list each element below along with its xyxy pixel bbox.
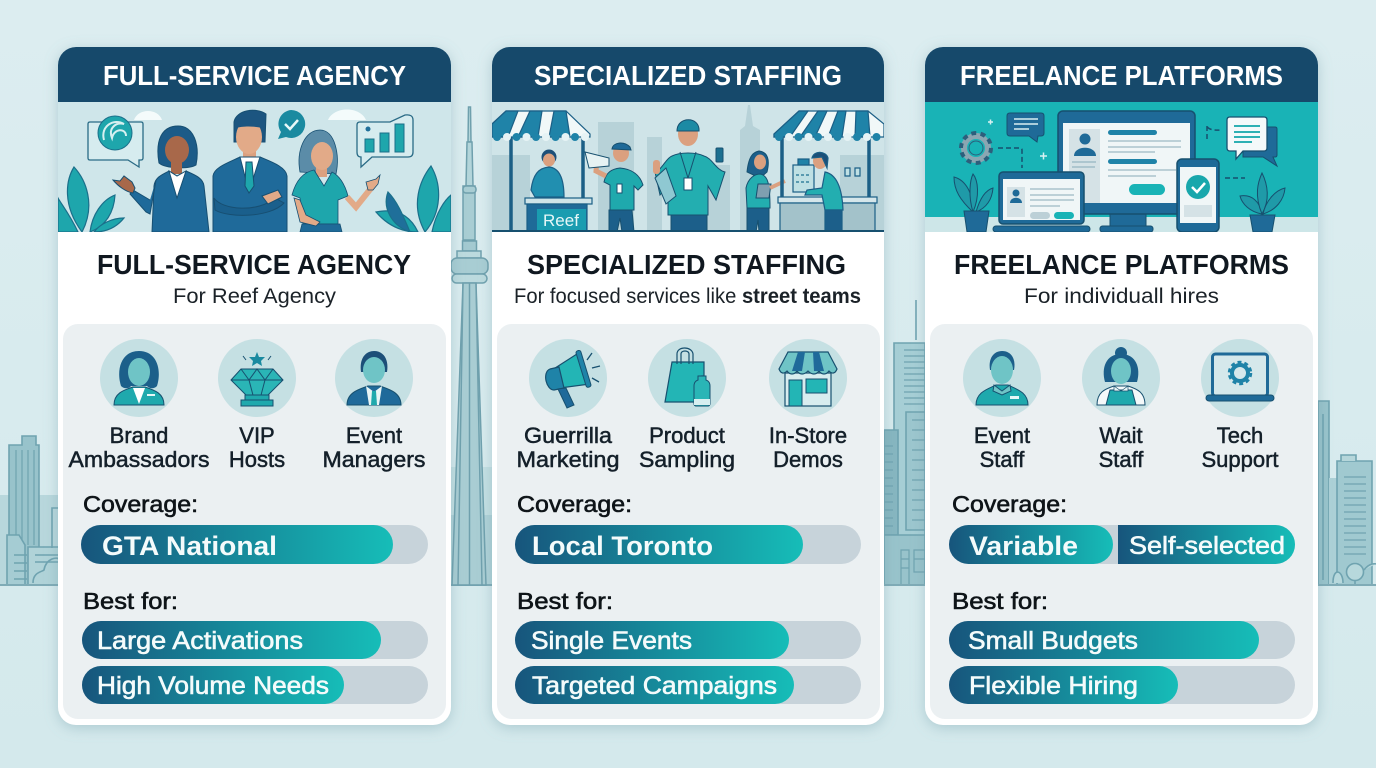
inner panel (930, 324, 1313, 719)
card title: FREELANCE PLATFORMS (954, 249, 1289, 280)
coverage bar: Variable and Self-selected: Self-selected (1129, 532, 1285, 560)
CN Tower (451, 107, 488, 585)
icon label: Wait Staff: Staff (1099, 447, 1144, 472)
check speech bubble (278, 110, 305, 139)
left potted plant (954, 174, 993, 232)
Toronto skyline (0, 300, 1376, 586)
man in blue suit (213, 110, 287, 232)
icon label: Brand Ambassadors: Brand (110, 423, 168, 448)
icon: tech support laptop (1201, 339, 1279, 417)
illustration: devices and freelance apps (925, 102, 1318, 232)
best-for bar: Single Events (515, 621, 861, 659)
best-for bar: Flexible Hiring (949, 666, 1295, 704)
icon: shopping bag and bottle (648, 339, 726, 417)
coverage bar: Variable and Self-selected: Variable (969, 531, 1078, 561)
card body (58, 47, 451, 725)
left stall (492, 111, 592, 232)
icon label: Wait Staff: Wait (1099, 423, 1143, 448)
chart speech bubble (357, 115, 413, 167)
staff with megaphone (585, 143, 643, 232)
coverage bar: Local Toronto: Local Toronto (532, 531, 713, 561)
icon label: Event Staff: Staff (980, 447, 1025, 472)
illustration: three agency staff (58, 102, 451, 232)
coverage label: Coverage: (83, 491, 198, 517)
best-for bar: Small Budgets: Small Budgets (968, 627, 1138, 655)
card header: FREELANCE PLATFORMS (960, 60, 1283, 91)
icon: wait staff (1082, 339, 1160, 417)
icon: event staff (963, 339, 1041, 417)
best-for bar: Small Budgets (949, 621, 1295, 659)
best-for bar: Large Activations (82, 621, 428, 659)
card title: SPECIALIZED STAFFING (527, 249, 846, 280)
card body (925, 47, 1318, 725)
central staff member (653, 120, 725, 232)
icon label: Event Managers: Managers (322, 447, 426, 472)
Reef sign: Reef (543, 211, 579, 230)
card: Specialized Staffing (492, 47, 884, 725)
inner panel (63, 324, 446, 719)
icon label: Product Sampling: Sampling (639, 447, 735, 472)
connector lines (998, 125, 1245, 178)
card header (492, 47, 884, 102)
icon label: Guerrilla Marketing: Marketing (516, 447, 620, 472)
icon: VIP diamond (218, 339, 296, 417)
icon: event manager (335, 339, 413, 417)
card subtitle: For individuall hires (1024, 285, 1219, 308)
icon label: Event Managers: Event (346, 423, 402, 448)
illustration: street team stalls (492, 102, 884, 232)
coverage label: Coverage: (952, 491, 1067, 517)
best-for bar: High Volume Needs (82, 666, 428, 704)
best for label: Best for: (83, 588, 178, 614)
icon label: VIP Hosts: VIP (239, 423, 275, 448)
card header (925, 47, 1318, 102)
coverage bar: GTA National: GTA National (102, 531, 277, 561)
chat bubbles right (1227, 117, 1277, 166)
desktop monitor (1058, 111, 1195, 232)
inner panel (497, 324, 880, 719)
card header: FULL-SERVICE AGENCY (103, 60, 406, 91)
icon label: In-Store Demos: Demos (773, 447, 843, 472)
icon label: In-Store Demos: In-Store (769, 423, 847, 448)
woman in blue suit (113, 126, 209, 232)
icon: brand ambassador (100, 339, 178, 417)
phone (1177, 159, 1219, 232)
best-for bar: Targeted Campaigns: Targeted Campaigns (532, 672, 777, 700)
best-for bar: Large Activations: Large Activations (97, 627, 303, 655)
best-for bar: Single Events: Single Events (531, 627, 692, 655)
best-for bar: Targeted Campaigns (515, 666, 861, 704)
card title: FULL-SERVICE AGENCY (97, 249, 411, 280)
icon label: Tech Support: Tech (1217, 423, 1263, 448)
coverage bar: Variable and Self-selected (949, 525, 1295, 564)
card header (58, 47, 451, 102)
card: Full-Service Agency (58, 47, 451, 725)
right stall (774, 111, 884, 232)
coverage bar: Local Toronto (515, 525, 861, 564)
best for label: Best for: (952, 588, 1048, 614)
icon label: Tech Support: Support (1201, 447, 1279, 472)
best for label: Best for: (517, 588, 613, 614)
card: Freelance Platforms (925, 47, 1318, 725)
right plant (376, 166, 451, 232)
best-for bar: Flexible Hiring: Flexible Hiring (969, 672, 1138, 700)
laptop (993, 172, 1090, 232)
card subtitle: For focused services like street teams (514, 285, 861, 308)
icon: storefront (769, 339, 847, 417)
icon label: Brand Ambassadors: Ambassadors (68, 447, 210, 472)
icon label: Event Staff: Event (974, 423, 1030, 448)
right potted plant (1240, 173, 1285, 232)
icon label: Guerrilla Marketing: Guerrilla (524, 423, 613, 448)
coverage bar: GTA National (81, 525, 428, 564)
best-for bar: High Volume Needs: High Volume Needs (97, 672, 329, 700)
card body (492, 47, 884, 725)
card subtitle: For Reef Agency (173, 285, 337, 308)
coverage label: Coverage: (517, 491, 632, 517)
icon: megaphone (529, 339, 607, 417)
card header: SPECIALIZED STAFFING (534, 60, 842, 91)
gear (961, 133, 991, 163)
woman in teal top (292, 130, 380, 232)
Reef sign (537, 209, 586, 231)
icon label: VIP Hosts: Hosts (229, 447, 285, 472)
chat bubble left (1007, 113, 1044, 142)
city backdrop (492, 105, 884, 232)
staff with tablet (746, 151, 785, 232)
left plant (58, 167, 124, 232)
icon label: Product Sampling: Product (649, 423, 725, 448)
logo speech bubble (88, 116, 143, 167)
